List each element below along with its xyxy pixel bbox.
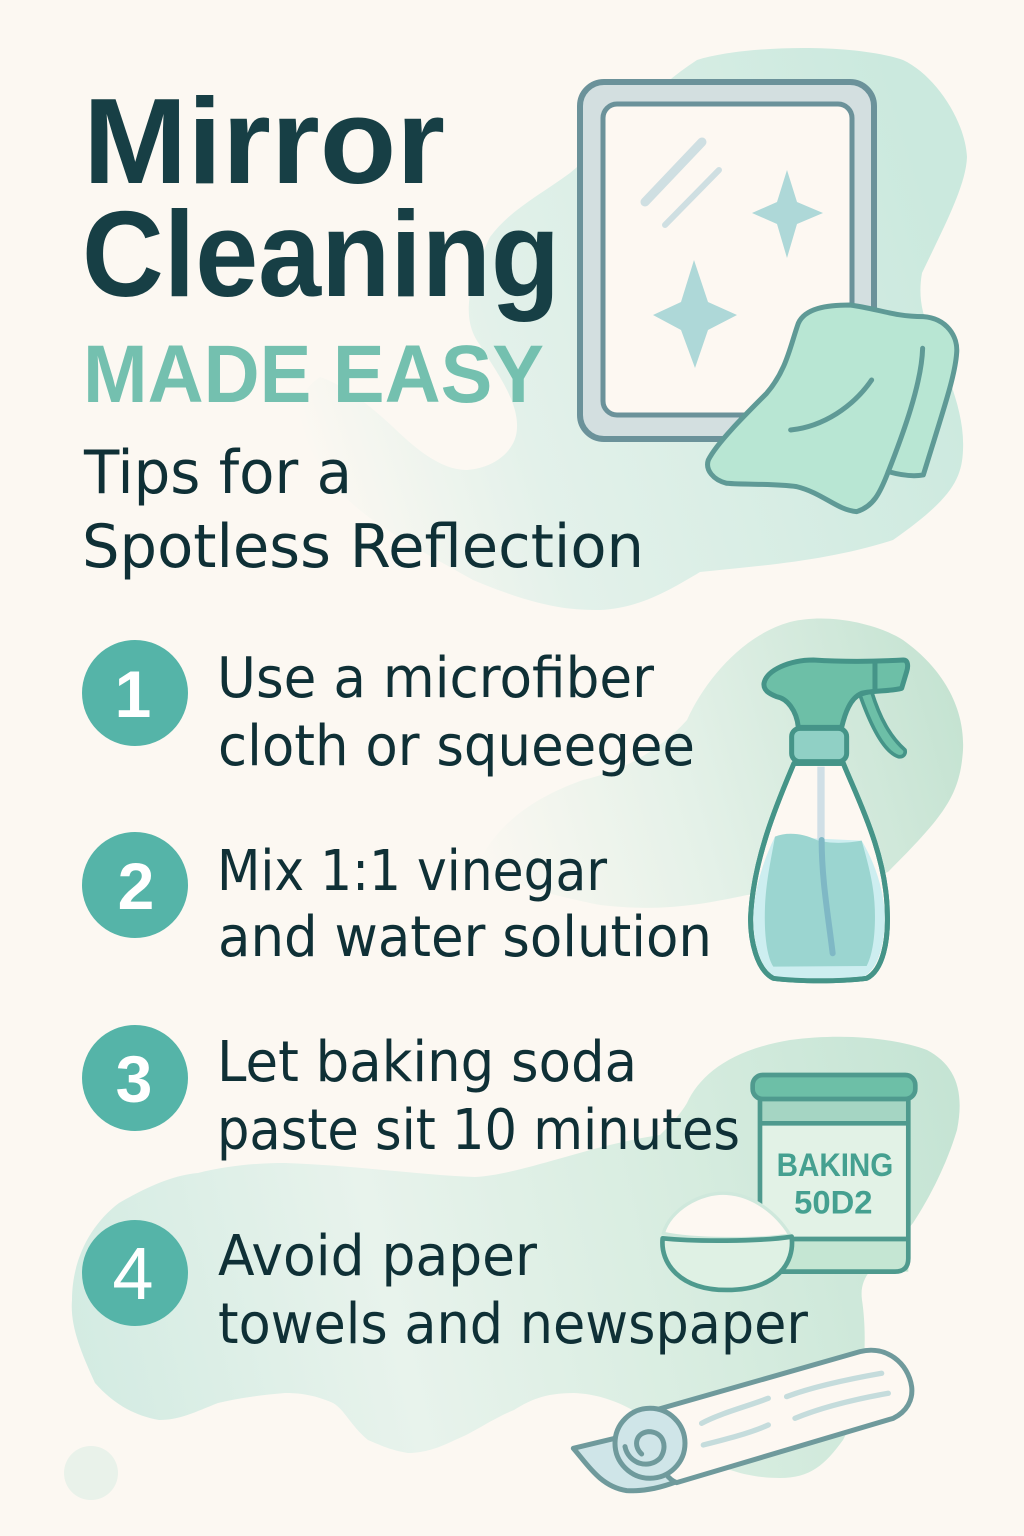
step 2: Mix 1:1 vinegar	[217, 839, 608, 904]
icon: baking soda jar and bowl	[662, 1075, 915, 1290]
tagline: Spotless Reflection	[82, 512, 644, 582]
background blob: top	[300, 48, 967, 610]
step 1: 1	[115, 657, 151, 731]
title	[82, 73, 560, 322]
step 4: 4	[112, 1232, 154, 1315]
decorative dot	[64, 1446, 118, 1500]
icon: spray bottle	[751, 660, 908, 981]
background blob: bottom	[72, 1037, 960, 1478]
jar label: 50D2	[794, 1184, 872, 1220]
background blob: middle	[480, 618, 963, 908]
icon: paper towel roll	[573, 1350, 912, 1491]
step 4: Avoid paper	[218, 1224, 538, 1289]
step 1: cloth or squeegee	[218, 714, 695, 779]
step 2	[82, 832, 712, 970]
tagline: Tips for a	[83, 438, 352, 508]
step 3: Let baking soda	[217, 1030, 637, 1095]
title: Mirror	[83, 73, 445, 209]
step 3: paste sit 10 minutes	[217, 1098, 740, 1163]
icon: microfiber cloth	[708, 305, 957, 512]
step 2: and water solution	[218, 905, 712, 970]
icon: mirror	[580, 82, 874, 439]
step 3: 3	[116, 1042, 152, 1116]
subtitle: made easy: MADE EASY	[83, 329, 544, 420]
step 3	[82, 1025, 740, 1163]
jar label	[777, 1147, 893, 1220]
title: Cleaning	[82, 186, 560, 322]
tagline	[82, 438, 644, 582]
step 4	[82, 1220, 809, 1357]
step 4: towels and newspaper	[218, 1292, 809, 1357]
jar label: BAKING	[777, 1147, 893, 1183]
step 1: Use a microfiber	[217, 646, 655, 711]
step 2: 2	[118, 849, 154, 923]
step 1	[82, 640, 695, 779]
